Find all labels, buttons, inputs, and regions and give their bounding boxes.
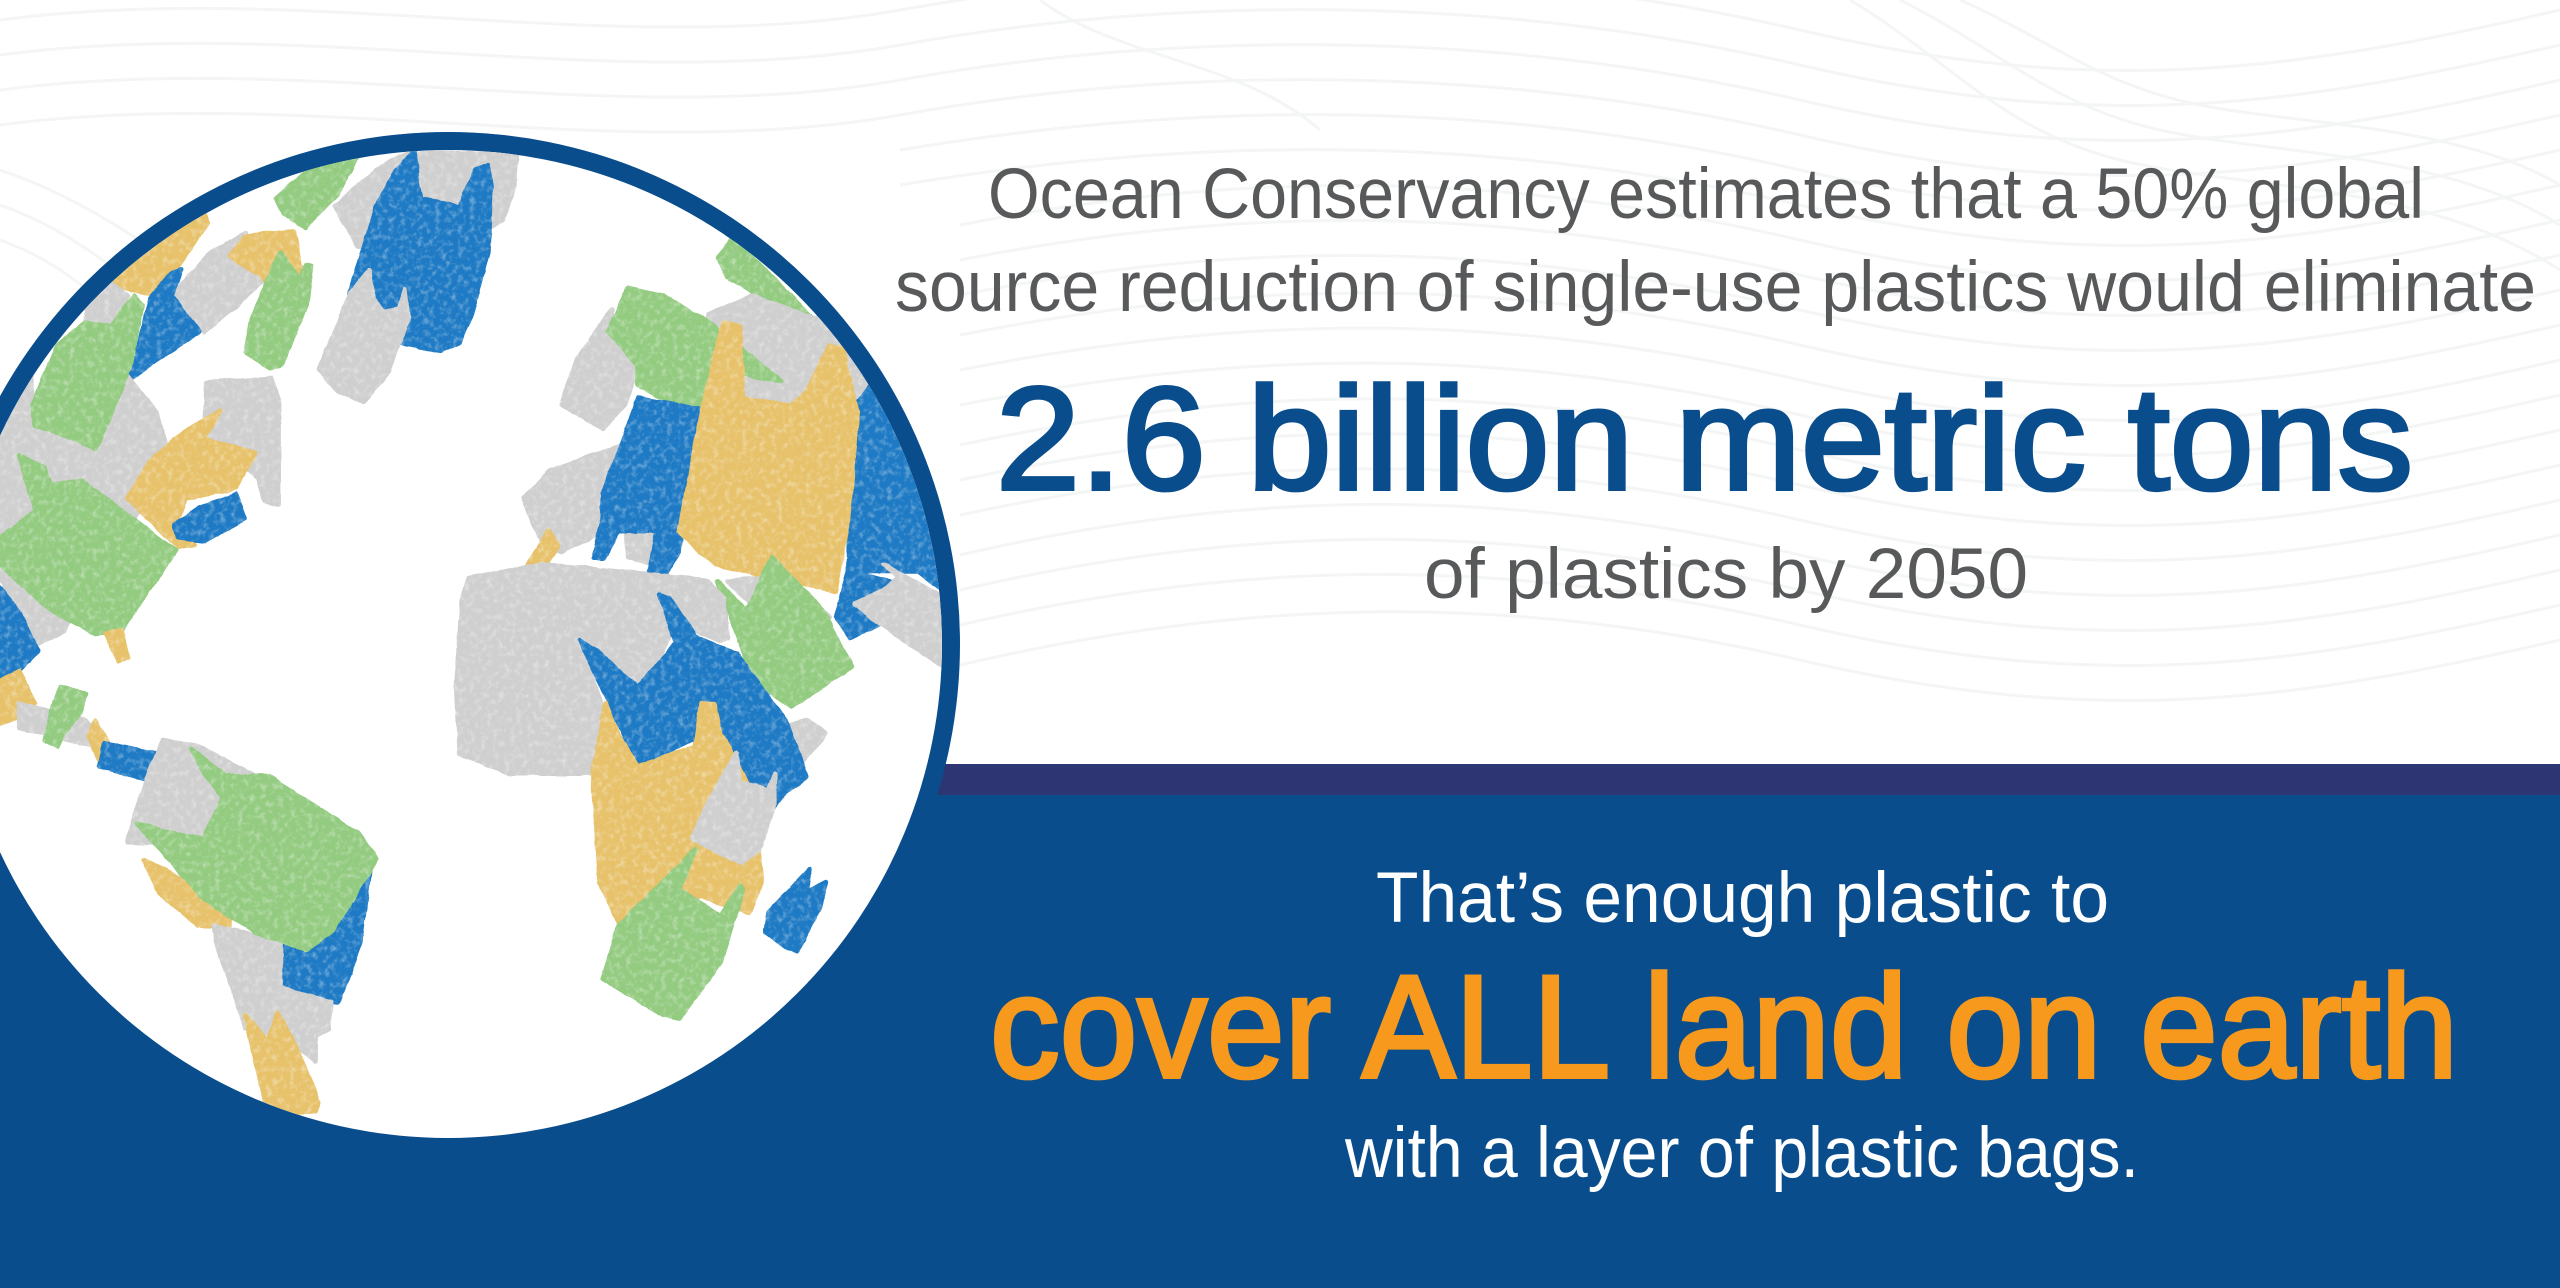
globe white disc [0,150,942,1138]
statistic caption: of plastics by 2050 [1424,535,2028,614]
globe: continents made of plastic bags [0,150,944,1115]
lower closing text: with a layer of plastic bags. [1344,1114,2139,1193]
Africa bags [456,564,826,1019]
intro text: Ocean Conservancy estimates that a 50% global [988,155,2424,234]
globe ring [0,132,960,1156]
Eurasia bags [523,238,944,707]
Central America bags [0,670,172,780]
headline statistic: 2.6 billion metric tons [996,357,2413,520]
panel: navy lower background [0,795,2560,1288]
background wave pattern [0,0,2560,700]
South America bags [128,740,376,1115]
purple divider band [0,764,2560,795]
lower headline: cover ALL land on earth [990,945,2458,1108]
intro text [895,155,2536,327]
North America bags [0,150,517,680]
lower lead-in text: That’s enough plastic to [1376,859,2109,938]
intro text: source reduction of single-use plastics would eliminate [895,248,2536,327]
